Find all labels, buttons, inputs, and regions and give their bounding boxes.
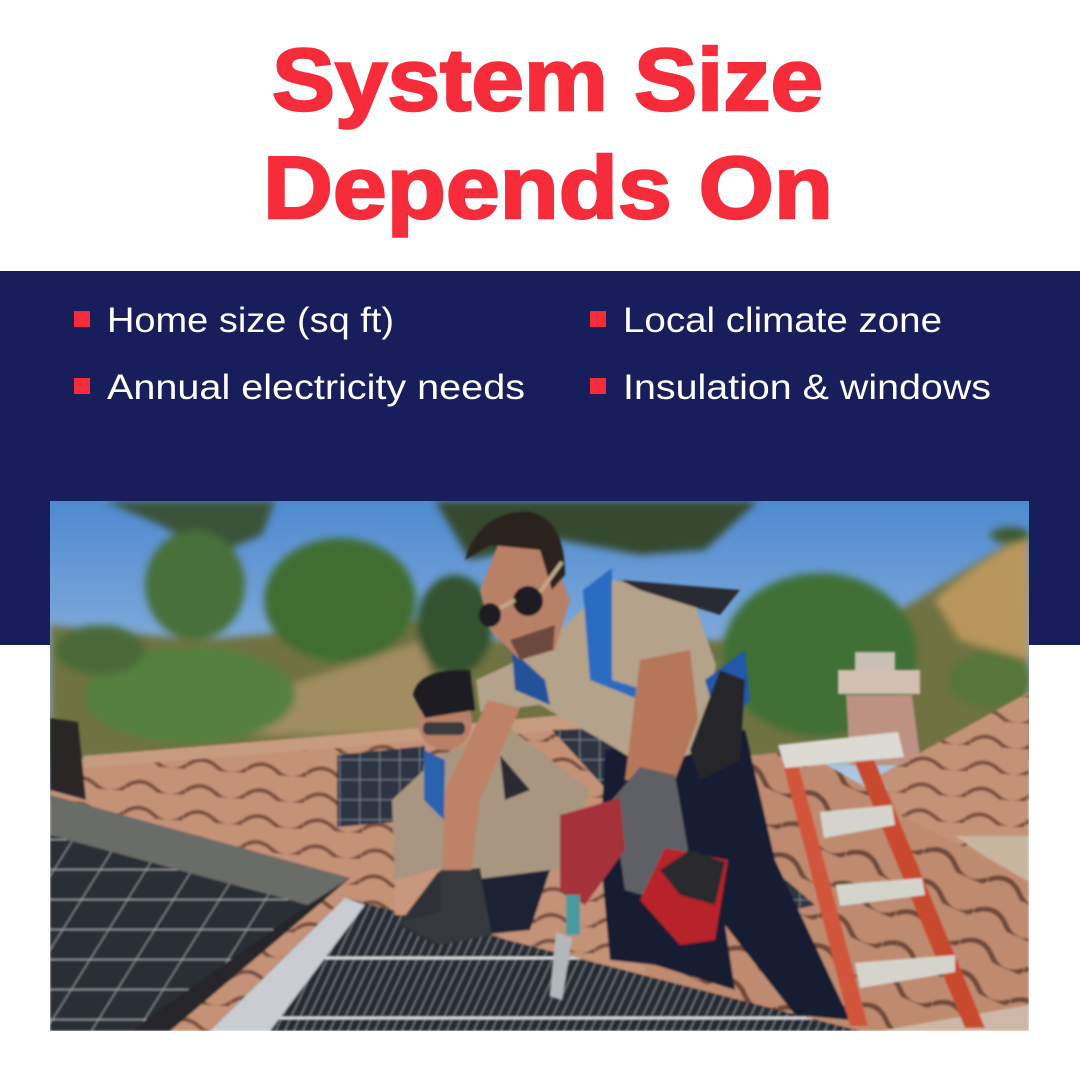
back solar panels <box>337 728 815 925</box>
right roof <box>880 692 1029 882</box>
main worker <box>400 512 850 1020</box>
left arm <box>442 700 520 880</box>
title <box>263 30 833 238</box>
bullet: insulation: Insulation & windows <box>623 368 991 407</box>
title: Depends On <box>263 138 833 237</box>
navy band <box>0 271 1080 645</box>
lower-left solar panel <box>50 795 350 1031</box>
hillside and trees <box>50 501 1032 760</box>
legs <box>600 730 850 1020</box>
sky <box>50 501 1029 801</box>
bullet: climate zone: Local climate zone <box>623 301 942 340</box>
torso shirt <box>476 580 716 770</box>
harness <box>583 568 645 700</box>
chimney <box>838 652 921 765</box>
bullet: home size: Home size (sq ft) <box>107 301 394 340</box>
back roof <box>54 714 644 1031</box>
right arm <box>625 650 698 780</box>
head <box>480 540 570 660</box>
foreground solar panel <box>210 898 860 1031</box>
ladder <box>778 732 985 1028</box>
bullet: electricity needs: Annual electricity needs <box>107 368 525 407</box>
roof base <box>50 788 895 804</box>
title: System Size <box>272 30 823 129</box>
sunglasses <box>479 562 562 627</box>
backpack left <box>50 718 86 800</box>
bullet list <box>74 301 991 407</box>
gloves <box>612 767 688 900</box>
photo: solar installers on a tiled roof <box>50 501 1029 1031</box>
drill <box>550 798 728 1000</box>
bottom right ledge <box>880 1005 1029 1031</box>
second worker <box>392 670 590 945</box>
